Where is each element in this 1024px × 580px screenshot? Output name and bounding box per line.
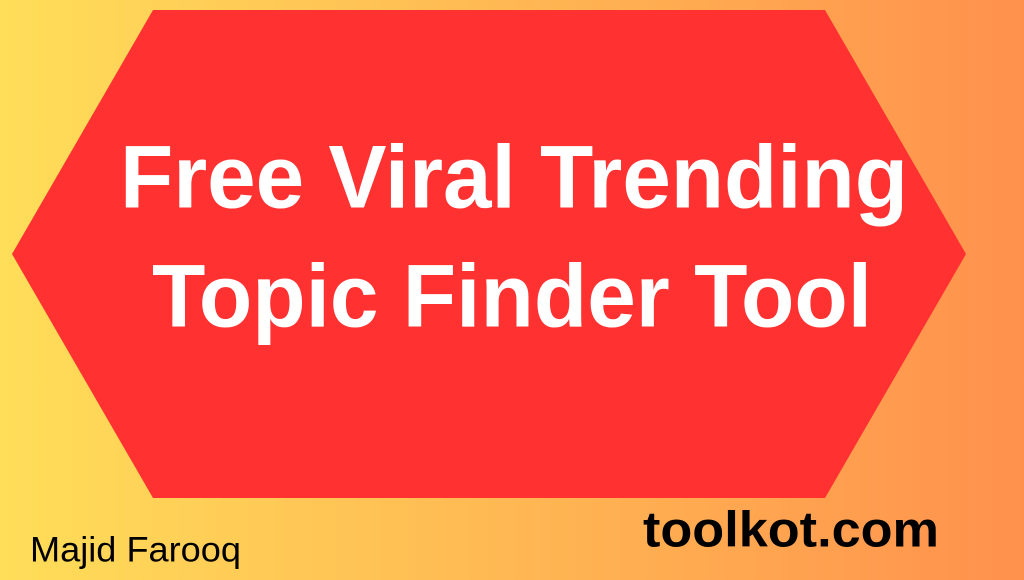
author name: Majid Farooq — [30, 530, 241, 570]
title line 1: Free Viral Trending — [120, 126, 908, 226]
red hexagon panel — [12, 10, 966, 498]
website url: toolkot.com — [643, 502, 939, 558]
title line 2: Topic Finder Tool — [152, 246, 872, 346]
